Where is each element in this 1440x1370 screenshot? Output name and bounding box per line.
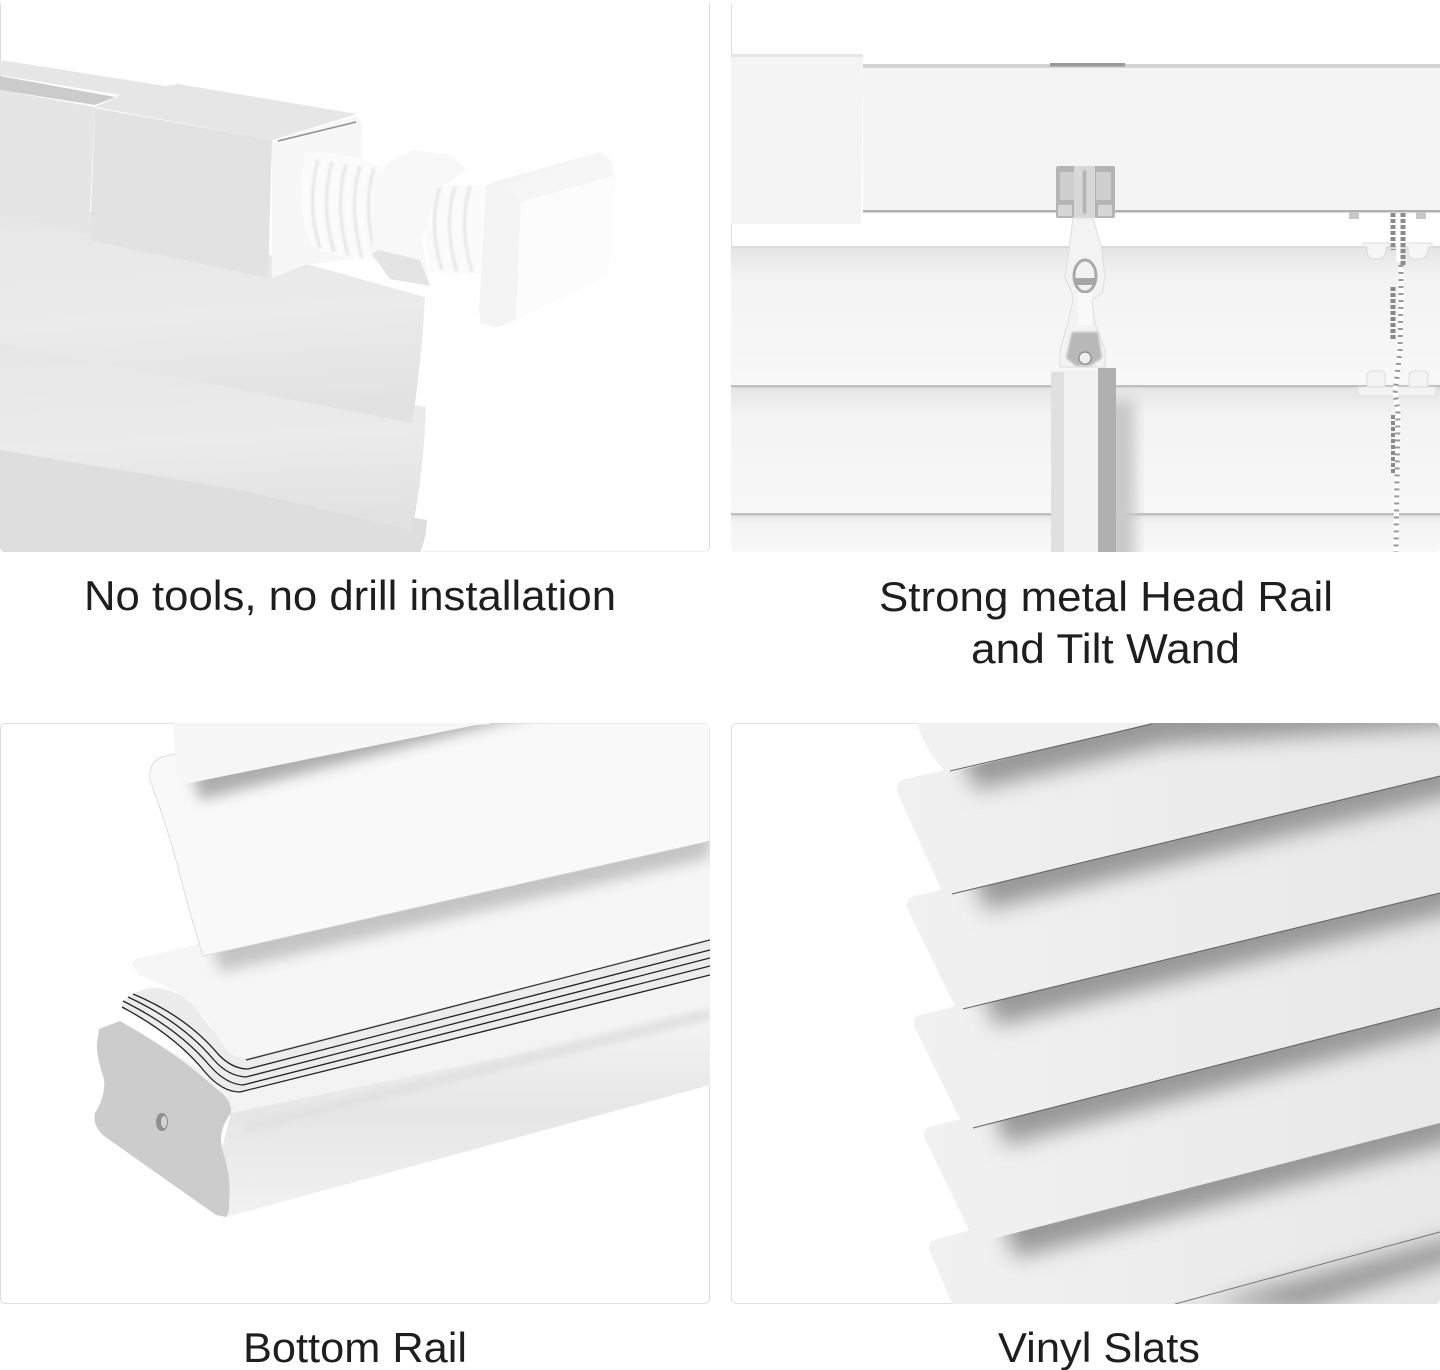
slat 5	[924, 1026, 1440, 1304]
slat 2	[897, 723, 1440, 894]
caption: head rail and tilt wand: Strong metal Head Rail	[879, 573, 1333, 620]
slat 6 shadow	[994, 1123, 1440, 1268]
slat 5 shadow	[986, 1008, 1440, 1155]
square end plate	[479, 152, 615, 327]
hanging slats	[731, 246, 1440, 570]
panel: no-drill installation bracket	[0, 0, 710, 552]
rail end cap with hole	[94, 1021, 231, 1217]
cord and ladder clips	[1349, 212, 1436, 552]
slat 4	[914, 910, 1440, 1128]
rail front	[120, 975, 710, 1217]
slat 6	[929, 1141, 1440, 1304]
panel: head rail and tilt wand	[731, 0, 1440, 570]
end bracket	[731, 54, 863, 224]
slat 3	[907, 770, 1440, 1009]
slats	[0, 190, 427, 552]
slat 1	[917, 723, 1152, 772]
stacked slats	[122, 938, 710, 1092]
slat 3 shadow	[966, 776, 1440, 920]
threaded bolt and nut	[312, 160, 474, 286]
slat 2 shadow	[954, 723, 1440, 800]
tilt clip and clear hook	[1056, 166, 1115, 367]
slat 4 shadow	[976, 894, 1440, 1036]
head rail	[0, 60, 362, 278]
upper slats	[132, 712, 710, 1058]
caption: bottom rail: Bottom Rail	[243, 1324, 467, 1370]
caption: vinyl slats: Vinyl Slats	[998, 1324, 1200, 1370]
caption: head rail and tilt wand: and Tilt Wand	[971, 625, 1240, 672]
tilt wand	[1051, 368, 1116, 552]
head rail body	[863, 63, 1440, 212]
caption: no tools: No tools, no drill installation	[84, 572, 616, 619]
panel: bottom rail	[0, 712, 710, 1304]
caption: head rail and tilt wand	[879, 573, 1333, 672]
panel: vinyl slats	[732, 695, 1440, 1310]
